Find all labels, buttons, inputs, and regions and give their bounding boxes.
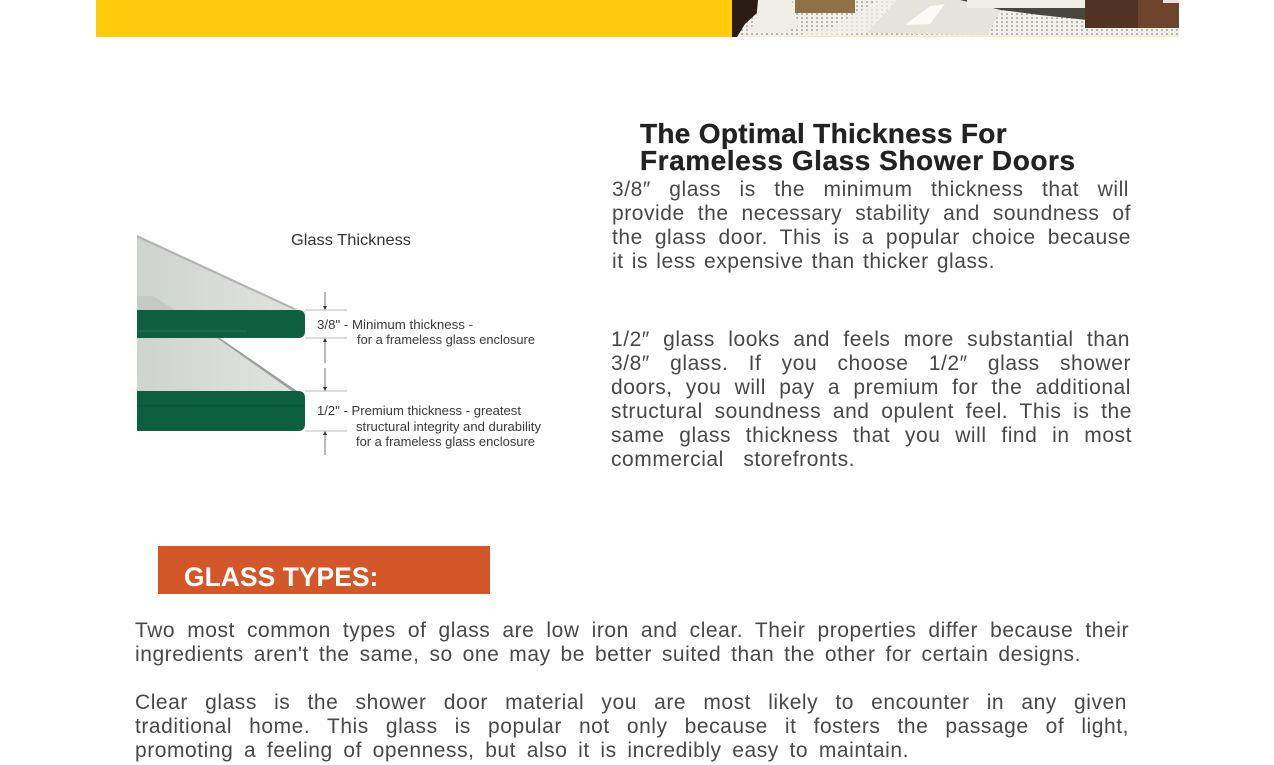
text block: clear glass	[135, 691, 1129, 762]
header band	[96, 0, 1179, 37]
label: 1/2 inch: for a frameless glass enclosure	[356, 434, 535, 449]
text block: glass types intro: Two most common types of glass are low iron and clear. Their properties differ because their	[135, 619, 1129, 642]
bathroom photo strip	[732, 0, 1179, 37]
text block: 1/2 inch glass: commercial storefronts.	[611, 448, 855, 471]
text block: clear glass: Clear glass is the shower door material you are most likely to encounter in any given	[135, 691, 1127, 714]
text block: 1/2 inch glass: same glass thickness that you will find in most	[611, 424, 1132, 447]
heading: optimal thickness	[640, 118, 1076, 176]
yellow header bar	[96, 0, 732, 37]
text block: 3/8 inch glass: 3/8″ glass is the minimum thickness that will	[612, 178, 1129, 201]
heading: optimal thickness: Frameless Glass Shower Doors	[640, 145, 1076, 176]
text block: 3/8 inch glass: provide the necessary stability and soundness of	[612, 202, 1131, 225]
text block: 3/8 inch glass: it is less expensive than thicker glass.	[612, 250, 995, 273]
section badge: glass types	[158, 546, 490, 594]
text block: 3/8 inch glass	[612, 178, 1131, 273]
diagram title: Glass Thickness	[291, 232, 411, 249]
text block: 1/2 inch glass: 3/8″ glass. If you choose 1/2″ glass shower	[611, 352, 1131, 375]
text block: clear glass: traditional home. This glass is popular not only because it fosters the passage of light,	[135, 715, 1129, 738]
heading: optimal thickness: The Optimal Thickness For	[640, 118, 1007, 149]
lower glass pane	[137, 338, 305, 431]
text block: 1/2 inch glass: doors, you will pay a premium for the additional	[611, 376, 1131, 399]
label: 3/8 inch: for a frameless glass enclosure	[357, 332, 535, 347]
text block: glass types intro	[135, 619, 1129, 666]
upper glass pane	[137, 235, 305, 338]
label: 1/2 inch: 1/2" - Premium thickness - greatest	[317, 403, 521, 418]
label: 1/2 inch	[317, 403, 542, 449]
label: 3/8 inch: 3/8" - Minimum thickness -	[317, 317, 473, 332]
text block: clear glass: promoting a feeling of openness, but also it is incredibly easy to maintain.	[135, 739, 909, 762]
badge label: GLASS TYPES:	[184, 562, 378, 592]
text block: 1/2 inch glass	[611, 328, 1132, 471]
text block: glass types intro: ingredients aren't the same, so one may be better suited than the other for certain designs.	[135, 643, 1081, 666]
diagram: glass thickness	[137, 232, 542, 455]
dimension lines and arrows	[305, 292, 347, 455]
label: 1/2 inch: structural integrity and durability	[356, 419, 542, 434]
text block: 3/8 inch glass: the glass door. This is a popular choice because	[612, 226, 1131, 249]
text block: 1/2 inch glass: 1/2″ glass looks and feels more substantial than	[611, 328, 1130, 351]
text block: 1/2 inch glass: structural soundness and opulent feel. This is the	[611, 400, 1132, 423]
label: 3/8 inch	[317, 317, 535, 347]
